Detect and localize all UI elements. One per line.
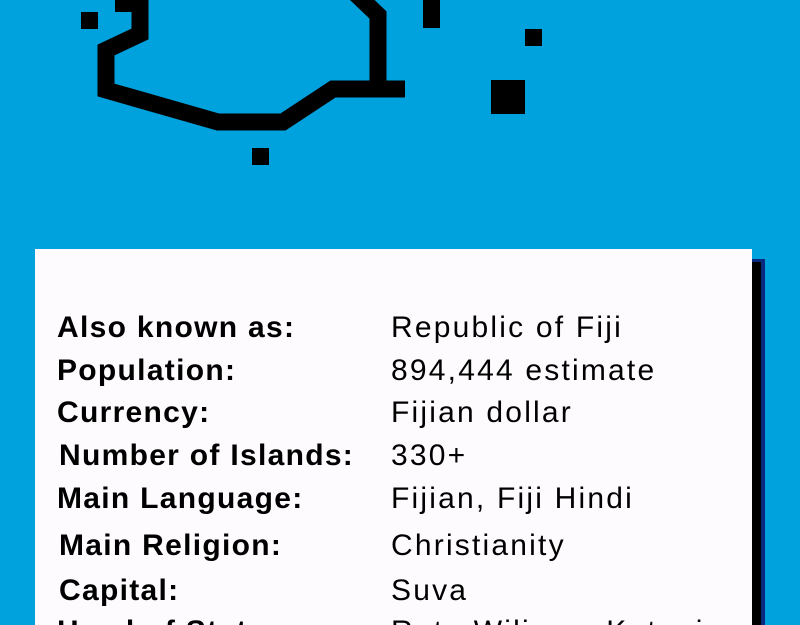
row: language [57,482,634,515]
row: population: 894,444 estimate [391,354,656,387]
row: religion: Christianity [391,529,566,562]
row: islands: Number of Islands: [59,439,354,472]
row: capital [59,574,468,607]
row: currency: Fijian dollar [391,396,573,429]
card shadow [752,259,765,625]
row: islands: 330+ [391,439,467,472]
row: religion: Main Religion: [59,529,282,562]
map of Fiji [81,0,542,165]
row: religion [59,529,566,562]
row: head of state [57,615,772,625]
panel: facts card [35,249,752,625]
row: capital: Suva [391,574,468,607]
row: also known as: Also known as: [57,311,295,344]
row: currency [57,396,573,429]
row: currency: Currency: [57,396,210,429]
row: capital: Capital: [59,574,179,607]
row: population: Population: [57,354,236,387]
row: language: Main Language: [57,482,304,515]
row: language: Fijian, Fiji Hindi [391,482,634,515]
row: also known as: Republic of Fiji [391,311,623,344]
row: also known as [57,311,623,344]
row: population [57,354,656,387]
